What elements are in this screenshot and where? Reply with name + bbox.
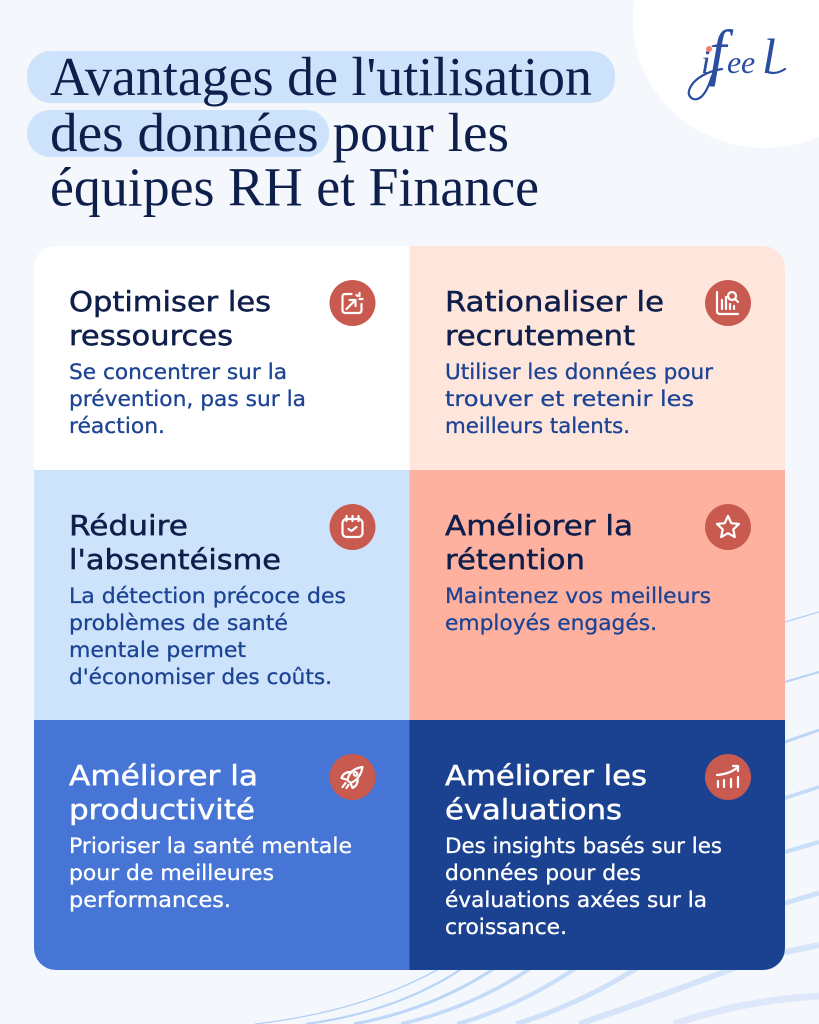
panel: Optimiser les ressources: Optimiser les xyxy=(69,285,271,318)
icon: rising chart xyxy=(705,754,751,800)
panel: Rationaliser le recrutement: trouver et retenir les xyxy=(445,387,694,411)
panel: Réduire l'absentéisme xyxy=(69,504,376,689)
panel: Améliorer les évaluations: croissance. xyxy=(445,915,567,939)
panel: Rationaliser le recrutement: Rationaliser le xyxy=(445,285,664,318)
panel: Réduire l'absentéisme: Réduire xyxy=(69,509,188,542)
panel: Rationaliser le recrutement: Utiliser les données pour xyxy=(445,360,713,384)
logo: ifeel xyxy=(689,19,785,99)
title highlight: second line xyxy=(27,110,329,157)
panel: Améliorer la rétention xyxy=(445,504,751,635)
panel: Améliorer la productivité: performances. xyxy=(69,888,231,912)
decorative white circle xyxy=(633,0,819,148)
logo: ifeel: f xyxy=(709,19,734,87)
logo: ifeel: e xyxy=(727,44,741,80)
panel: Réduire l'absentéisme: mentale permet xyxy=(69,638,246,662)
panel: Optimiser les ressources: prévention, pas sur la xyxy=(69,387,306,411)
panel: Améliorer les évaluations: évaluations xyxy=(445,793,622,826)
panel: Rationaliser le recrutement: recrutement xyxy=(445,319,635,352)
panel: Améliorer la productivité: Améliorer la xyxy=(69,759,258,792)
panel: Améliorer la rétention: rétention xyxy=(445,543,585,576)
icon: star xyxy=(705,504,751,550)
title line 2: des données pour les xyxy=(50,102,509,163)
title line 1: Avantages de l'utilisation xyxy=(50,46,592,107)
panel: Améliorer la productivité: pour de meilleures xyxy=(69,861,274,885)
panel: Améliorer la rétention: Maintenez vos meilleurs xyxy=(445,584,711,608)
panel: Optimiser les ressources xyxy=(69,280,376,438)
benefits grid xyxy=(34,246,786,970)
panel: Optimiser les ressources: réaction. xyxy=(69,414,165,438)
panel: Améliorer la rétention: employés engagés. xyxy=(445,611,657,635)
panel: Réduire l'absentéisme: l'absentéisme xyxy=(69,543,281,576)
panel: Améliorer les évaluations: évaluations axées sur la xyxy=(445,888,707,912)
title line 3: équipes RH et Finance xyxy=(50,156,539,218)
title highlight: first line xyxy=(27,51,615,103)
icon: rocket xyxy=(330,754,376,800)
panel: Rationaliser le recrutement xyxy=(445,280,751,438)
panel: Améliorer les évaluations: données pour des xyxy=(445,861,641,885)
logo: ifeel: e xyxy=(741,44,755,80)
panel: Améliorer les évaluations: Des insights basés sur les xyxy=(445,834,722,858)
panel: Réduire l'absentéisme: La détection précoce des xyxy=(69,584,346,608)
panel: Améliorer la productivité: productivité xyxy=(69,793,255,826)
panel: Améliorer la rétention: Améliorer la xyxy=(445,509,633,542)
panel: Améliorer les évaluations xyxy=(445,754,751,939)
icon: chart search xyxy=(705,280,751,326)
icon: growth image xyxy=(330,280,376,326)
panel: Réduire l'absentéisme: d'économiser des coûts. xyxy=(69,665,332,689)
panel: Améliorer la productivité: Prioriser la santé mentale xyxy=(69,834,352,858)
icon: calendar check xyxy=(330,504,376,550)
logo: ifeel: i xyxy=(701,44,710,81)
panel: Rationaliser le recrutement: meilleurs talents. xyxy=(445,414,630,438)
title xyxy=(27,46,615,218)
panel: Améliorer la productivité xyxy=(69,754,376,912)
panel: Améliorer les évaluations: Améliorer les xyxy=(445,759,647,792)
panel: Optimiser les ressources: Se concentrer sur la xyxy=(69,360,287,384)
panel: Réduire l'absentéisme: problèmes de santé xyxy=(69,611,288,635)
logo: ifeel: l xyxy=(762,28,776,84)
panel: Optimiser les ressources: ressources xyxy=(69,319,233,352)
